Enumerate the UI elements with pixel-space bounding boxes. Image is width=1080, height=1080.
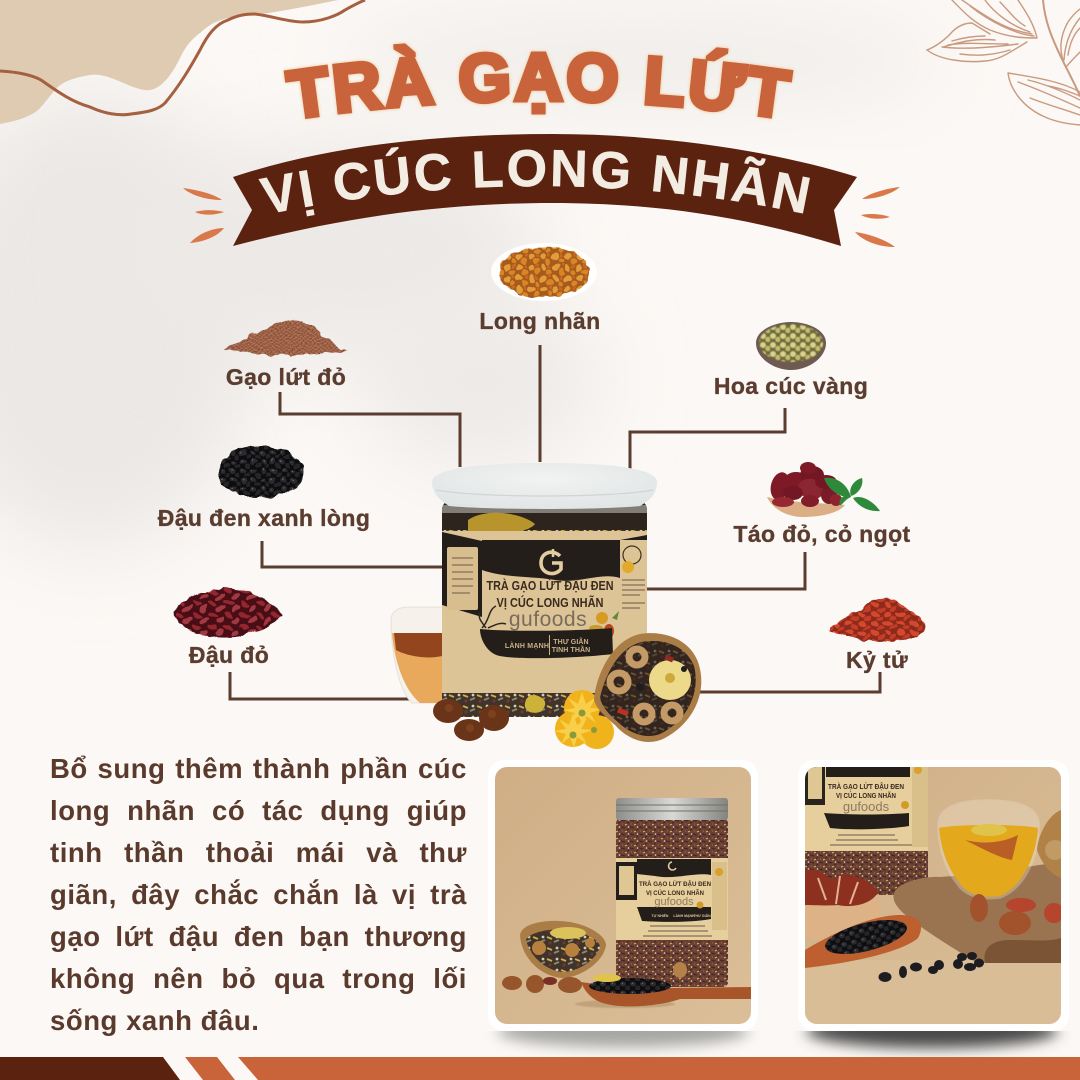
loose black beans xyxy=(878,952,984,982)
body text xyxy=(50,753,467,1036)
cropped jar: gufoods xyxy=(843,799,890,814)
tall jar: THƯ GIÃN xyxy=(693,913,711,918)
tall jar: LÀNH MẠNH xyxy=(673,913,695,918)
body text: không nên bỏ qua trong lối xyxy=(50,963,467,994)
dried longan xyxy=(502,975,582,993)
label bottom strip: LÀNH MẠNH xyxy=(505,641,549,650)
body text: long nhãn có tác dụng giúp xyxy=(50,795,467,826)
label bottom strip: THƯ GIÃN xyxy=(553,637,589,646)
label black band xyxy=(482,535,647,581)
label: Táo đỏ, cỏ ngọt xyxy=(733,521,911,547)
body text: giãn, đây chắc chắn là vị trà xyxy=(50,879,467,910)
icon: red rice pile xyxy=(225,320,347,355)
label G logo xyxy=(541,549,561,574)
cropped jar: VỊ CÚC LONG NHÃN xyxy=(836,791,896,800)
photo 2 card shadow xyxy=(798,1031,1066,1057)
decorative tan blob, top left xyxy=(0,0,338,124)
ingredient: đậu đỏ xyxy=(172,588,282,668)
wooden spoon with black beans xyxy=(581,974,751,1006)
yellow chrysanthemum flowers xyxy=(554,690,614,749)
long nhãn pieces at jar base xyxy=(433,699,509,741)
kraft label xyxy=(442,531,647,693)
basket xyxy=(520,921,606,978)
label brand: gufoods xyxy=(509,608,587,631)
label: Long nhãn xyxy=(479,308,601,334)
connector lines xyxy=(230,345,880,699)
product jar: VỊ CÚC LONG NHÃN xyxy=(496,595,604,610)
dried longan on board xyxy=(970,894,1064,935)
photo card 1 xyxy=(488,760,758,1031)
basket at right edge xyxy=(1037,810,1061,878)
ingredient: hoa cúc vàng xyxy=(714,322,868,399)
decorative wavy line xyxy=(0,0,365,115)
label bottom strip xyxy=(480,628,613,658)
banner text: VỊ CÚC LONG NHÃN xyxy=(258,146,810,216)
label: Kỷ tử xyxy=(846,647,908,673)
label fruit icon xyxy=(589,611,619,638)
icon: dried chrysanthemum bowl xyxy=(756,322,826,370)
ingredient: kỷ tử xyxy=(828,598,926,673)
label reed icon xyxy=(479,606,506,628)
footer stripes xyxy=(0,1057,1080,1080)
label bottom strip: TINH THẦN xyxy=(552,644,590,654)
body text: gạo lứt đậu đen bạn thương xyxy=(50,921,467,952)
photo card 2 xyxy=(798,760,1069,1031)
wooden board xyxy=(893,862,1061,963)
tall jar: TỰ NHIÊN xyxy=(652,913,669,918)
banner spark accents xyxy=(183,187,900,247)
label: Đậu đỏ xyxy=(189,642,269,668)
ingredient: gạo lứt đỏ xyxy=(225,320,347,390)
ribbon banner xyxy=(233,134,857,246)
tea cup behind jar xyxy=(391,607,445,703)
icon: goji berries pile xyxy=(828,598,926,642)
decorative line-art leaves, top right xyxy=(927,0,1080,125)
tall jar: gufoods xyxy=(654,896,694,908)
photo 1 card shadow xyxy=(492,1031,754,1056)
glass of tea xyxy=(938,800,1039,899)
body text: sống xanh đâu. xyxy=(50,1005,259,1036)
jar lid xyxy=(432,463,657,509)
icon: black beans pile xyxy=(218,446,304,498)
label: Đậu đen xanh lòng xyxy=(158,505,370,531)
dried chrysanthemum xyxy=(649,660,691,700)
cropped jar xyxy=(805,760,928,895)
jar body xyxy=(442,500,647,717)
label title: TRÀ GẠO LỨT ĐẬU ĐEN xyxy=(486,578,614,593)
tall jar xyxy=(616,798,728,987)
label: Gạo lứt đỏ xyxy=(226,364,346,390)
body text: Bổ sung thêm thành phần cúc xyxy=(50,753,467,784)
wooden spoon with black beans xyxy=(805,913,921,968)
label: Hoa cúc vàng xyxy=(714,373,868,399)
ingredient: đậu đen xanh lòng xyxy=(158,446,370,531)
tall jar: VỊ CÚC LONG NHÃN xyxy=(646,890,704,897)
wood block and date slices xyxy=(805,870,880,940)
ingredient: táo đỏ, cỏ ngọt xyxy=(733,462,911,547)
icon: red dates on wooden dish with leaves xyxy=(767,462,880,517)
icon: red kidney beans pile xyxy=(172,588,282,638)
label cup icon xyxy=(622,546,645,608)
woven basket with tea mix xyxy=(594,633,701,742)
tall jar: TRÀ GẠO LỨT ĐẬU ĐEN xyxy=(639,881,711,888)
product jar xyxy=(432,463,657,717)
background soft shadows xyxy=(0,15,940,550)
icon: white bowl with long nhãn xyxy=(491,243,597,301)
red date slices xyxy=(610,649,680,722)
cropped jar: TRÀ GẠO LỨT ĐẬU ĐEN xyxy=(828,782,904,791)
body text: tinh thần thoải mái và thư xyxy=(50,837,467,868)
title: TRÀ GẠO LỨT: TRÀ GẠO LỨT xyxy=(282,42,796,121)
label side panel xyxy=(442,532,482,617)
ingredient: long nhãn xyxy=(479,243,601,334)
